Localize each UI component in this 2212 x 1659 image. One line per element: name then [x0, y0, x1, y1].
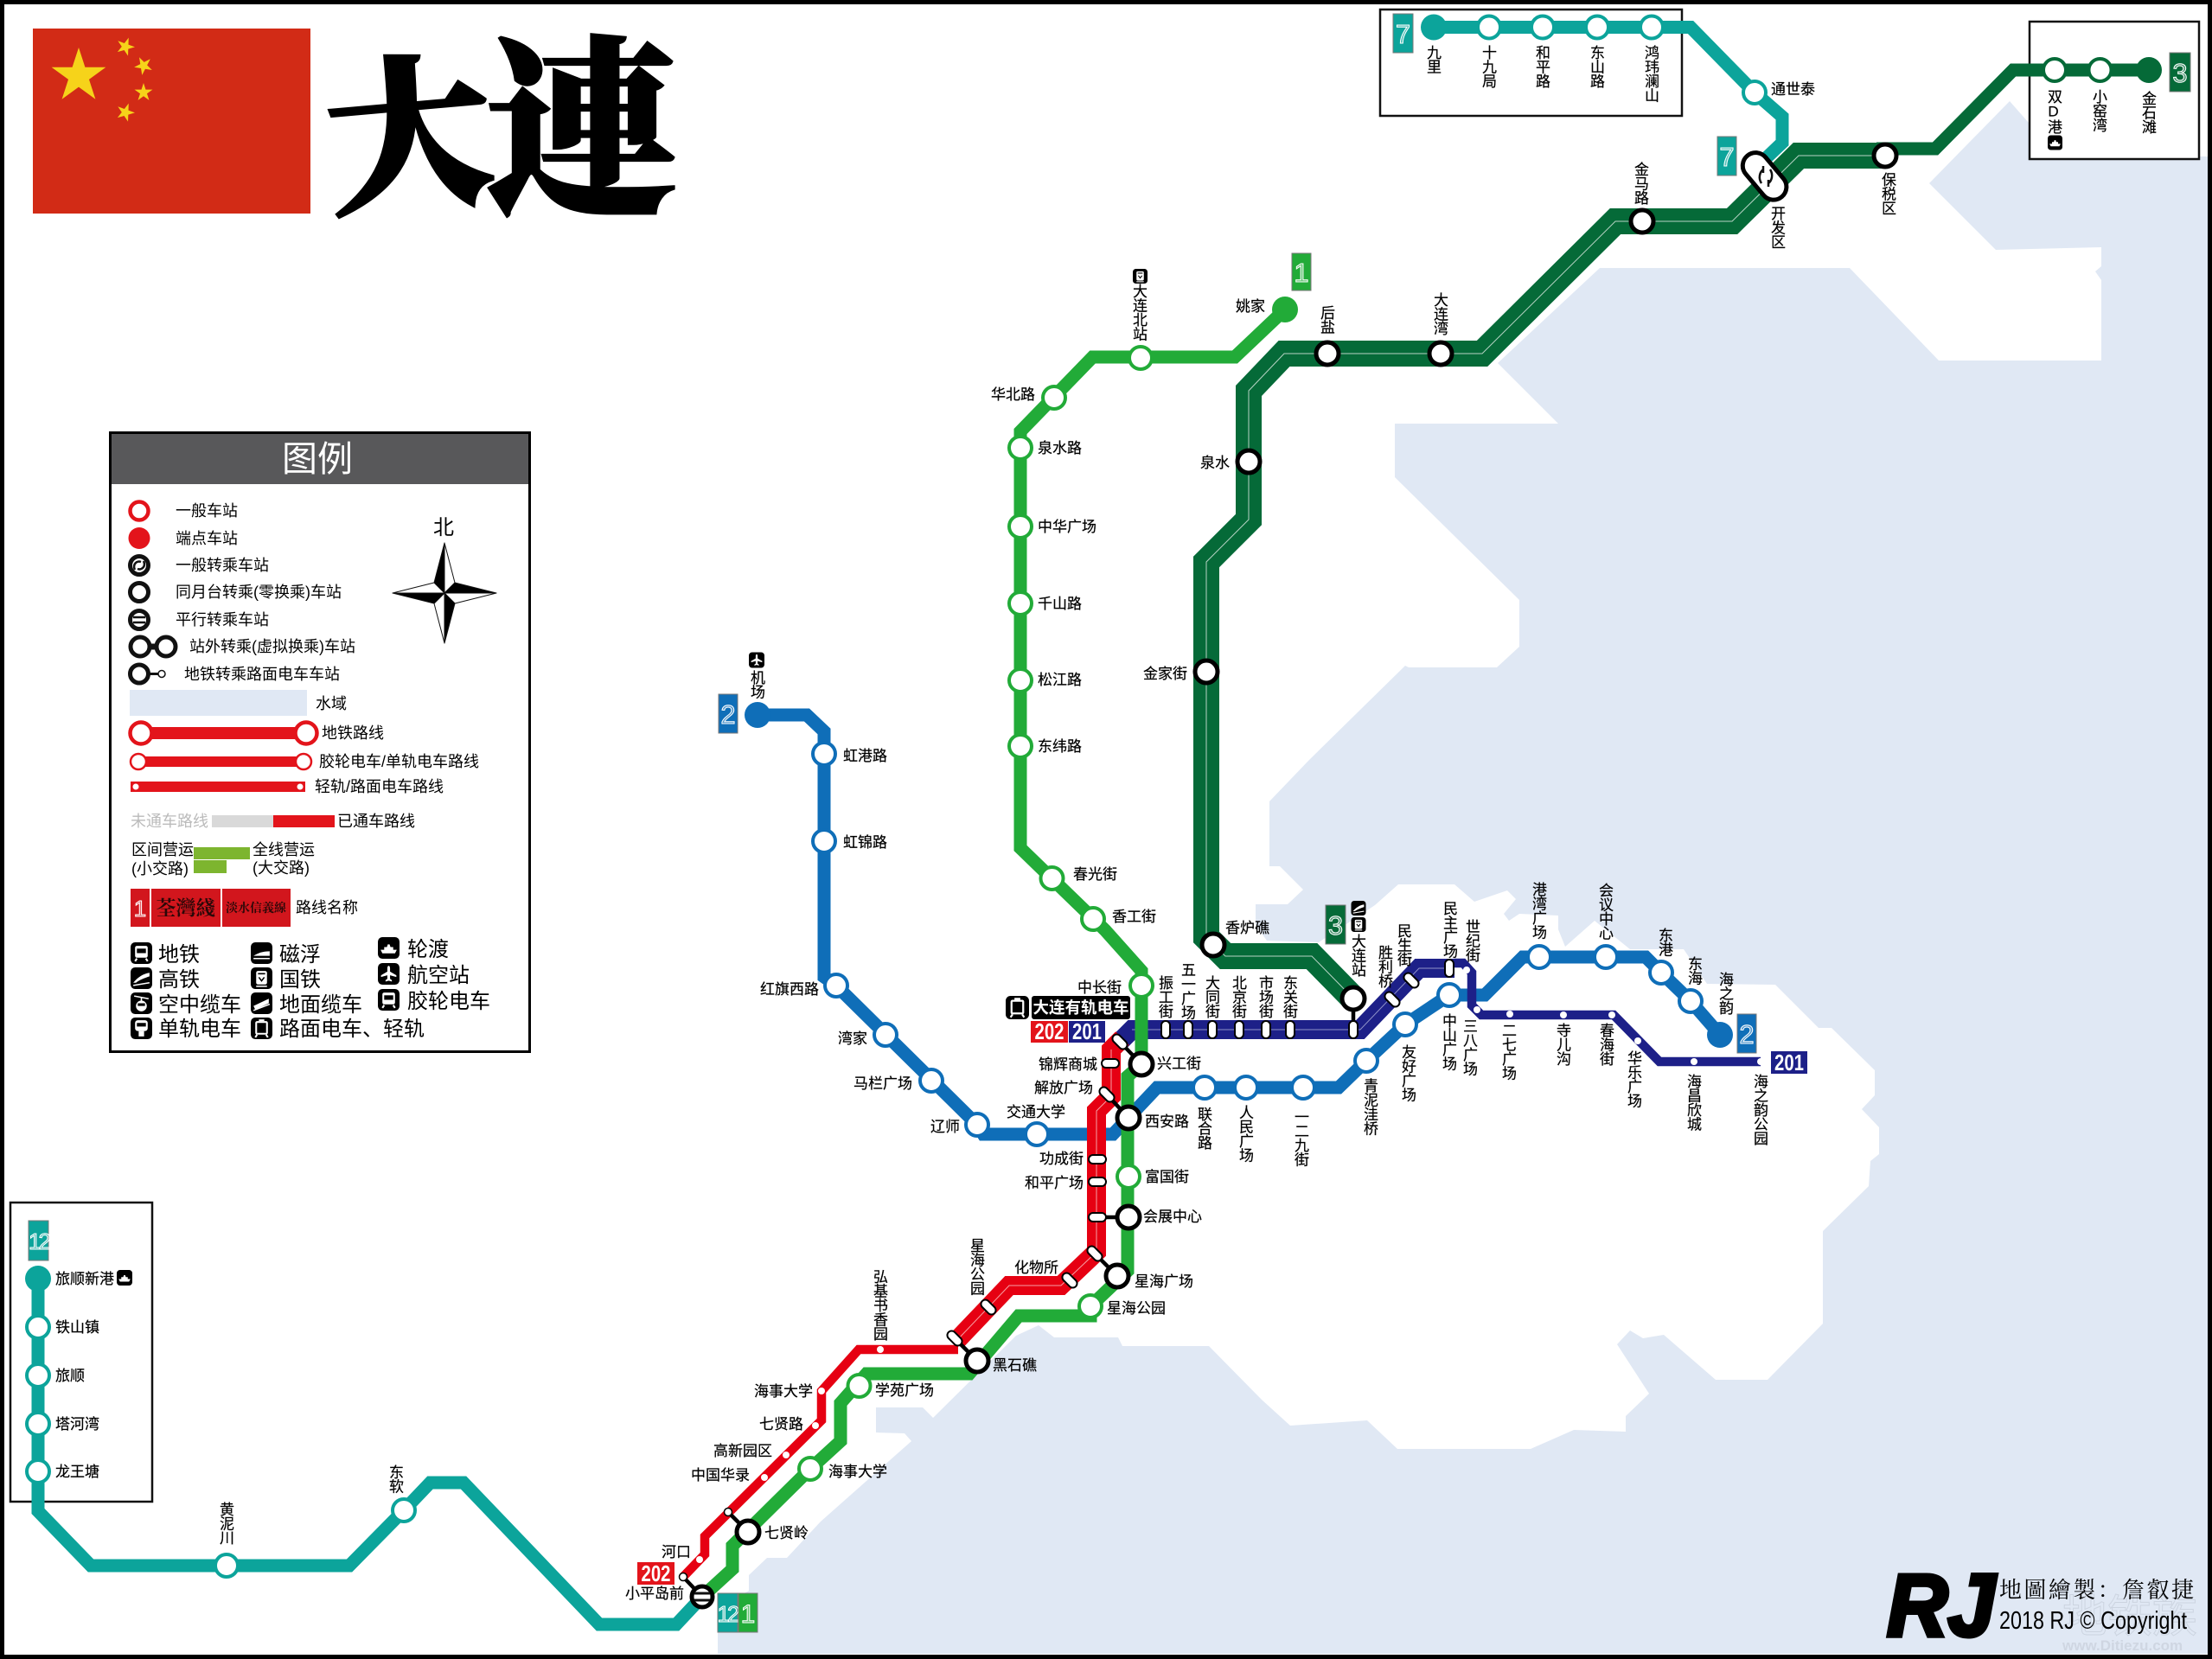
- line number badge: 12 inset: [29, 1221, 50, 1260]
- legend transport icons: 地铁: [158, 943, 200, 967]
- station labels: line 201: 民主广场: [1441, 901, 1458, 959]
- station labels: line 201: [1156, 901, 1768, 1145]
- station labels: line 3: 双D港: [2045, 89, 2062, 134]
- station labels: line 3: [1143, 89, 2157, 977]
- station labels: line 3: 后盐: [1318, 305, 1335, 334]
- station labels: line 2: 会议中心: [1596, 883, 1614, 940]
- station symbol: tram transfer: 地铁转乘路面电车车站: [184, 666, 340, 683]
- legend service pattern: (小交路): [131, 860, 189, 877]
- station labels: line 202: 中国华录: [691, 1467, 750, 1484]
- watermark: 地铁族: [2062, 1592, 2197, 1643]
- station labels: line 2: 联合路: [1195, 1107, 1212, 1150]
- title: Dalian calligraphy: 連: [486, 29, 678, 241]
- legend transport icons: 胶轮电车: [407, 990, 490, 1013]
- line 12 route: [38, 1279, 702, 1624]
- line number badge: 2 Haizhiyun: [1737, 1014, 1756, 1053]
- legend water swatch: 水域: [316, 695, 347, 712]
- station symbol: terminal: 端点车站: [176, 530, 238, 547]
- station symbol: terminal: [128, 527, 238, 549]
- line 12 stations: [25, 1266, 415, 1577]
- line number badge: 1 Yaojia: 1: [1294, 258, 1309, 288]
- station labels: line 12: 铁山镇: [55, 1319, 99, 1336]
- station labels: line 202: 海事大学: [754, 1383, 813, 1400]
- line number badge: 7 Kaifaqu: 7: [1719, 142, 1735, 172]
- line number badge: 1 Yaojia: [1292, 253, 1311, 290]
- station labels: line 1: 松江路: [1038, 672, 1082, 688]
- station labels: line 201: 大同街: [1203, 975, 1219, 1018]
- station labels: line 1: 会展中心: [1143, 1209, 1202, 1225]
- station labels: line 201: 春海街: [1597, 1023, 1614, 1066]
- line number badge: 7 inset: 7: [1396, 19, 1410, 49]
- station labels: line 7: 和平路: [1533, 45, 1550, 88]
- station symbol: same platform: 同月台转乘(零换乘)车站: [176, 584, 342, 601]
- legend metro line: [130, 723, 384, 743]
- line badge: 201 east: 201: [1774, 1050, 1804, 1075]
- station labels: line 2: 东港: [1656, 928, 1672, 956]
- station labels: line 1: 华北路: [991, 386, 1035, 403]
- station labels: line 7: 九里: [1424, 45, 1441, 73]
- station labels: line 3: 香炉礁: [1225, 920, 1269, 936]
- station labels: line 1: 学苑广场: [875, 1382, 934, 1399]
- tram heading: Dalian tram: 大连有轨电车: [1032, 999, 1129, 1017]
- station labels: line 1: 中华广场: [1038, 519, 1096, 535]
- station labels: line 201: 三八广场: [1461, 1018, 1477, 1076]
- station labels: line 12: 旅顺新港: [55, 1271, 114, 1287]
- line number badge: 12 inset: 12: [29, 1228, 50, 1254]
- legend transport icons: 路面电车、轻轨: [279, 1018, 425, 1041]
- credit text: [1999, 1578, 2194, 1635]
- station labels: line 1: 海事大学: [828, 1464, 887, 1480]
- station labels: line 201: 华乐广场: [1625, 1050, 1641, 1108]
- line 202 route: [683, 1038, 1122, 1577]
- station labels: line 7: 鸿玮澜山: [1642, 45, 1659, 102]
- station labels: line 2: 辽师: [930, 1119, 960, 1135]
- station labels: line 1: 香工街: [1112, 909, 1156, 925]
- station labels: line 1: 大连北站: [1130, 284, 1147, 341]
- station labels: line 2: 海之韵: [1717, 972, 1733, 1016]
- legend transport icons: [131, 937, 490, 1041]
- line number badge: 3 inset: 3: [2172, 58, 2188, 88]
- station labels: line 1: 千山路: [1038, 596, 1082, 612]
- station symbol: normal: 一般车站: [176, 502, 238, 520]
- station symbol: parallel transfer: [130, 610, 269, 629]
- compass: [393, 516, 496, 643]
- station labels: line 2: 东海: [1685, 956, 1702, 986]
- legend rubber tyre line: 胶轮电车/单轨电车路线: [319, 753, 479, 770]
- legend light rail line: [131, 778, 444, 795]
- station labels: line 12: 黄泥川: [217, 1502, 233, 1545]
- station labels: line 1: 东纬路: [1038, 738, 1082, 755]
- legend transport icons: 国铁: [279, 968, 321, 992]
- inset box: line 12: [10, 1203, 152, 1502]
- station labels: line 1: 西安路: [1145, 1113, 1189, 1130]
- station labels: line 201: 北京街: [1230, 975, 1247, 1018]
- transfer connectors: [683, 999, 1353, 1597]
- station labels: line 201: 寺儿沟: [1554, 1023, 1570, 1067]
- tram stop pills: line 202 and 201: [945, 960, 1454, 1348]
- station labels: line 202: [662, 1056, 1097, 1560]
- station labels: line 201: 市场街: [1256, 975, 1273, 1018]
- station labels: line 2: 中山广场: [1440, 1013, 1456, 1071]
- legend transport icons: 单轨电车: [158, 1018, 241, 1041]
- station labels: line 12: 东软: [387, 1464, 403, 1493]
- station labels: line 202: 和平广场: [1025, 1175, 1084, 1191]
- legend rubber tyre line: [131, 753, 479, 770]
- water area: [718, 101, 2208, 1654]
- legend service pattern: 全线营运: [253, 841, 315, 858]
- interchange stations: [692, 1053, 1153, 1607]
- station labels: line 1: 星海广场: [1135, 1273, 1193, 1290]
- line 7 route: [1434, 28, 1782, 162]
- legend opened vs unopened: [131, 813, 415, 830]
- legend line name: [131, 889, 358, 927]
- station symbol: out-of-station transfer: [131, 637, 355, 656]
- legend line name: 荃灣綫: [156, 897, 216, 919]
- legend light rail line: 轻轨/路面电车路线: [315, 778, 444, 795]
- station labels: line 1: 小平岛前: [625, 1586, 684, 1602]
- station labels: line 2: 人民广场: [1237, 1105, 1254, 1163]
- station labels: line 202: 高新园区: [713, 1443, 772, 1459]
- station labels: line 7: [1424, 45, 1815, 102]
- credit text: 地圖繪製：詹叡捷: [1999, 1578, 2194, 1603]
- legend opened vs unopened: 未通车路线: [131, 813, 208, 830]
- station labels: line 201: 海昌欣城: [1685, 1074, 1702, 1131]
- title: Dalian calligraphy: [320, 29, 678, 241]
- station labels: line 1: 姚家: [1236, 298, 1265, 315]
- station labels: line 12: 龙王塘: [55, 1464, 99, 1480]
- station labels: line 201: 东关街: [1281, 975, 1297, 1018]
- legend service pattern: [131, 841, 315, 877]
- station labels: line 201: 胜利桥: [1376, 945, 1392, 988]
- station labels: line 12: 塔河湾: [55, 1416, 99, 1432]
- station labels: line 2: 青泥洼桥: [1361, 1078, 1378, 1135]
- station labels: line 12: [55, 1271, 403, 1545]
- legend transport icons: 磁浮: [279, 943, 321, 967]
- station labels: line 2: 红旗西路: [760, 981, 819, 998]
- line number badges: 12 and 1: 1: [741, 1600, 755, 1629]
- legend service pattern: (大交路): [253, 859, 310, 877]
- line badge: 202 Xiaopingdao: 202: [642, 1560, 671, 1586]
- line 3 route: [1206, 70, 2149, 999]
- legend line name: 1: [134, 896, 146, 922]
- flag of China: [33, 29, 310, 214]
- compass: 北: [433, 516, 454, 539]
- station labels: line 1: 泉水路: [1038, 440, 1082, 456]
- title: Dalian calligraphy: 大: [320, 42, 500, 238]
- legend opened vs unopened: 已通车路线: [337, 813, 415, 830]
- station labels: line 201: 海之韵公园: [1751, 1074, 1768, 1145]
- station labels: line 2: [748, 670, 1733, 1166]
- station labels: line 1: 七贤岭: [764, 1525, 809, 1541]
- legend metro line: 地铁路线: [322, 724, 384, 742]
- station labels: line 3: 金马路: [1632, 162, 1648, 205]
- legend transport icons: 高铁: [158, 968, 200, 992]
- station symbol: normal: [130, 501, 238, 520]
- line 3 stations: [1195, 57, 2162, 1010]
- station labels: line 3: 泉水: [1200, 455, 1230, 471]
- panel: legend: [111, 432, 529, 1051]
- station labels: line 2: 虹港路: [843, 748, 887, 764]
- station labels: line 201: 民生街: [1395, 923, 1411, 967]
- legend transport icons: 轮渡: [407, 938, 449, 961]
- station labels: line 202: 功成街: [1039, 1151, 1084, 1167]
- tram heading: Dalian tram: [1006, 996, 1130, 1044]
- station labels: line 7: 十九局: [1480, 45, 1496, 89]
- line number badge: 2 airport: [719, 694, 738, 733]
- station labels: line 1: 星海公园: [1107, 1300, 1166, 1317]
- legend title: 图例: [282, 439, 353, 479]
- line 7 stations: [1421, 14, 1766, 104]
- station labels: line 3: 小窑湾: [2090, 89, 2107, 133]
- station labels: line 7: 东山路: [1588, 45, 1605, 88]
- legend water swatch: [130, 690, 347, 716]
- line number badge: 3 inset: [2170, 53, 2190, 92]
- station labels: line 2: 湾家: [838, 1030, 867, 1047]
- station symbol: transfer: [130, 557, 269, 574]
- station labels: line 2: 交通大学: [1007, 1104, 1065, 1120]
- line number badges: 12 and 1: 12: [718, 1601, 739, 1627]
- station symbol: out-of-station transfer: 站外转乘(虚拟换乘)车站: [189, 638, 355, 655]
- station labels: line 1: [625, 284, 1265, 1602]
- station labels: line 2: 机场: [748, 670, 764, 699]
- station labels: line 1: 富国街: [1145, 1169, 1189, 1185]
- line 201 route: [1118, 963, 1761, 1062]
- tram heading: Dalian tram: 201: [1072, 1018, 1102, 1044]
- station labels: line 1: 兴工街: [1157, 1056, 1201, 1072]
- station: Xiaopingdao parallel transfer mark: [694, 1593, 710, 1600]
- station labels: line 2: 虹锦路: [843, 834, 887, 851]
- line number badge: 2 airport: 2: [720, 699, 736, 730]
- legend transport icons: 航空站: [407, 964, 470, 987]
- station labels: line 202: 弘基书香园: [871, 1269, 887, 1341]
- station labels: line 3: 开发区: [1768, 206, 1785, 249]
- watermark: www.Ditiezu.com: [2062, 1637, 2183, 1654]
- line 2 stations: [745, 702, 1733, 1145]
- station labels: line 201: 五一广场: [1179, 962, 1195, 1020]
- line number badge: 3 Dalian station: 3: [1328, 910, 1343, 941]
- legend transport icons: 空中缆车: [158, 993, 241, 1017]
- station labels: line 3: 保税区: [1879, 172, 1896, 215]
- legend header: [112, 434, 528, 484]
- station labels: line 202: 七贤路: [759, 1416, 803, 1432]
- station symbol: transfer: 一般转乘车站: [176, 557, 269, 574]
- legend line name: 淡水信義線: [226, 901, 286, 916]
- inset box: line 7: [1380, 10, 1682, 116]
- station labels: line 1: 黑石礁: [993, 1357, 1037, 1374]
- tram heading: Dalian tram: 202: [1034, 1018, 1064, 1044]
- station labels: line 3: 金家街: [1143, 666, 1187, 682]
- station labels: line 1: 春光街: [1073, 866, 1117, 883]
- line 1 stations: [799, 297, 1298, 1480]
- legend service pattern: 区间营运: [131, 841, 194, 858]
- station labels: line 202: 锦辉商城: [1039, 1056, 1097, 1073]
- station labels: line 3: 金石滩: [2139, 91, 2157, 134]
- legend line name: 路线名称: [296, 899, 358, 916]
- station labels: line 1: 中长街: [1077, 979, 1122, 996]
- service icons on map: [117, 135, 2062, 1286]
- station symbol: parallel transfer: 平行转乘车站: [176, 611, 269, 629]
- station labels: line 202: 解放广场: [1034, 1080, 1093, 1096]
- credit logo: RJ: RJ: [1887, 1556, 1997, 1655]
- station labels: line 201: 世纪街: [1463, 919, 1480, 962]
- station labels: line 12: 旅顺: [55, 1368, 85, 1384]
- station labels: line 7: 通世泰: [1771, 81, 1815, 98]
- station: Kaifaqu transfer pill: [1737, 147, 1792, 205]
- legend transport icons: 地面缆车: [279, 993, 362, 1017]
- small stops: lines 202 and 201: [680, 967, 1764, 1580]
- line number badges: 12 and 1: [718, 1593, 758, 1632]
- station labels: line 201: 振工街: [1156, 975, 1173, 1018]
- station labels: line 2: 港湾广场: [1530, 882, 1546, 940]
- station labels: line 202: 河口: [662, 1544, 691, 1560]
- line 2 route: [758, 715, 1720, 1134]
- inset box: line 3: [2030, 22, 2199, 159]
- station labels: line 202: 星海公园: [968, 1238, 984, 1295]
- line number badge: 3 Dalian station: [1326, 905, 1346, 944]
- station labels: line 3: 大连站: [1349, 934, 1366, 977]
- station labels: line 2: 友好广场: [1399, 1044, 1416, 1102]
- station labels: line 2: 一二九街: [1292, 1109, 1309, 1166]
- line number badge: 7 Kaifaqu: [1717, 137, 1736, 175]
- station labels: line 2: 马栏广场: [853, 1075, 912, 1092]
- station labels: line 202: 化物所: [1014, 1260, 1058, 1276]
- line number badge: 7 inset: [1393, 14, 1413, 53]
- station labels: line 201: 二七广场: [1499, 1023, 1517, 1081]
- station labels: line 3: 大连湾: [1431, 292, 1448, 336]
- line 1 route: [702, 309, 1285, 1597]
- line number badge: 2 Haizhiyun: 2: [1739, 1019, 1755, 1050]
